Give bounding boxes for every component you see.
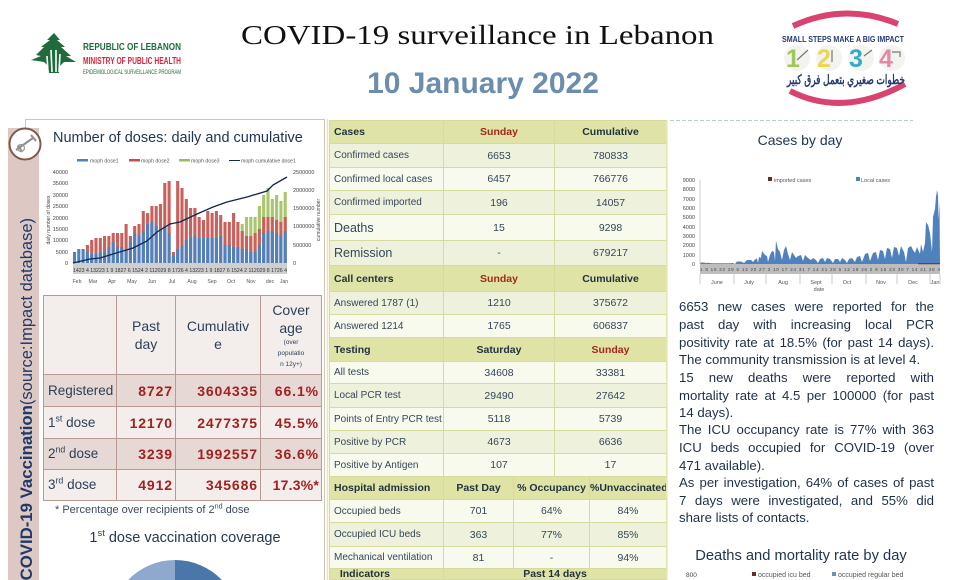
table: cases, calls, testing and hospital: Answered 1214 xyxy=(334,320,404,332)
bar chart: cases by day xyxy=(682,177,940,293)
bar chart: cases by day: 1 8 15 22 29 6 13 20 27 3 10 17 24 31 7 14 21 28 5 12 19 26 2 9 16 23 30 7 14 21 28 4 xyxy=(700,267,940,272)
table: vaccination doses xyxy=(43,295,322,501)
text block: daily summary: 6653 new cases were reported for the xyxy=(679,299,934,314)
chart axis: 3000 xyxy=(683,234,695,240)
chart axes: 30000 xyxy=(53,193,68,199)
panel: vaccination side band xyxy=(8,128,39,580)
chart axes: 40000 xyxy=(53,170,68,176)
table: vaccination doses: Past xyxy=(132,318,160,334)
table: vaccination doses: day xyxy=(135,336,157,352)
table: cases, calls, testing and hospital: 1210 xyxy=(487,297,511,309)
table: cases, calls, testing and hospital: 77% xyxy=(541,528,562,540)
table: cases, calls, testing and hospital: 5118 xyxy=(488,413,510,425)
text block: daily summary: 7 days were investigated, and 55% did xyxy=(679,493,934,508)
logo: Ministry of Public Health xyxy=(31,33,181,76)
table: cases, calls, testing and hospital: %Unvaccinated xyxy=(590,482,667,494)
table: vaccination doses: 2477375 xyxy=(197,414,258,430)
text block: daily summary: ICU beds occupied for COVID-19 (over xyxy=(679,440,934,455)
bar chart: doses daily and cumulative: Mar xyxy=(89,279,98,285)
side band title: COVID-19 Vaccination(source:Impact database) xyxy=(17,218,36,580)
table: vaccination doses: 36.6% xyxy=(275,446,319,462)
table: cases, calls, testing and hospital: Sunday xyxy=(480,126,518,138)
table: cases, calls, testing and hospital: 27642 xyxy=(596,390,625,402)
table: cases, calls, testing and hospital: 81 xyxy=(473,552,484,564)
chart legend: imported cases xyxy=(774,178,812,184)
table: vaccination doses: 1992557 xyxy=(197,446,258,462)
table: cases, calls, testing and hospital: 29490 xyxy=(484,390,514,402)
table: cases, calls, testing and hospital: Cases xyxy=(334,126,365,138)
bar chart: doses daily and cumulative: 1000000 xyxy=(293,224,314,230)
bar chart: doses daily and cumulative xyxy=(46,158,322,285)
chart axis: 5000 xyxy=(683,215,695,221)
heading: number of doses: Number of doses: daily and cumulative xyxy=(53,130,303,146)
bar chart: doses daily and cumulative: Jan xyxy=(280,279,288,285)
bar chart: doses daily and cumulative: Jun xyxy=(148,279,156,285)
chart: deaths legend and axis: occupied icu bed xyxy=(758,572,811,579)
chart axis: 4000 xyxy=(683,225,695,231)
table: cases, calls, testing and hospital: 701 xyxy=(470,505,487,517)
table: cases, calls, testing and hospital: Cumulative xyxy=(582,126,639,138)
bar chart: doses daily and cumulative: dec xyxy=(266,279,275,285)
table: vaccination doses: Registered xyxy=(48,382,113,398)
table: cases, calls, testing and hospital: Mechanical ventilation xyxy=(334,552,432,563)
chart legend: moph dose2 xyxy=(141,158,170,164)
heading: cases by day: Cases by day xyxy=(758,132,842,148)
text block: daily summary: mortality rate at 4.5 per 100000 (for past xyxy=(679,388,934,403)
logo: small steps make a big impact: 2 xyxy=(817,45,831,73)
table: cases, calls, testing and hospital: Testing xyxy=(334,344,371,356)
heading: first dose coverage: 1st dose vaccination coverage xyxy=(89,527,281,546)
table: cases, calls, testing and hospital: 5739 xyxy=(599,413,622,425)
bar chart: doses daily and cumulative: Sep xyxy=(207,279,217,285)
table: cases, calls, testing and hospital: 679217 xyxy=(593,247,628,259)
table: cases, calls, testing and hospital: 33381 xyxy=(596,366,625,378)
table: vaccination doses: 345686 xyxy=(206,477,258,493)
bar chart: cases by day: Jan xyxy=(931,280,939,286)
chart: deaths legend and axis: 800 xyxy=(686,572,697,579)
chart axis xyxy=(683,178,695,268)
chart axis: 6000 xyxy=(683,206,695,212)
table: vaccination doses: 17.3%* xyxy=(273,477,319,493)
table: cases, calls, testing and hospital: 606837 xyxy=(593,320,628,332)
table: cases, calls, testing and hospital: 84% xyxy=(618,505,639,517)
bar chart: doses daily and cumulative: cumulative number xyxy=(316,199,322,241)
table: cases, calls, testing and hospital: 375672 xyxy=(593,297,628,309)
table: cases, calls, testing and hospital: Local PCR test xyxy=(334,390,401,401)
table: cases, calls, testing and hospital: 6457 xyxy=(487,173,511,185)
chart axes: 0 xyxy=(65,261,68,267)
table: cases, calls, testing and hospital: 4673 xyxy=(487,436,511,448)
table: vaccination doses: 3604335 xyxy=(197,382,258,398)
chart legend: moph dose3 xyxy=(191,158,220,164)
chart axes: 5000 xyxy=(56,250,68,256)
bar chart: doses daily and cumulative: Apr xyxy=(108,279,116,285)
bar chart: cases by day: June xyxy=(711,280,723,286)
bar chart: cases by day: July xyxy=(744,280,754,286)
bar chart: cases by day: Oct xyxy=(843,280,852,286)
bar chart: doses daily and cumulative: Oct xyxy=(227,279,236,285)
logo: small steps make a big impact: 1 xyxy=(786,45,800,73)
text block: daily summary: As per investigation, 64% of cases of past xyxy=(679,475,934,490)
table: cases, calls, testing and hospital: 14057 xyxy=(596,196,625,208)
text block: daily summary: The ICU occupancy rate is 77% with 363 xyxy=(679,422,934,437)
table: vaccination doses: age xyxy=(279,320,303,336)
table: cases, calls, testing and hospital: Answered 1787 (1) xyxy=(334,298,418,308)
bar chart: doses daily and cumulative: 0 xyxy=(293,261,296,267)
table: cases, calls, testing and hospital: 17 xyxy=(605,459,616,471)
bar chart: cases by day: Dec xyxy=(908,280,918,286)
table: cases, calls, testing and hospital: 107 xyxy=(490,459,508,471)
chart axis: 9000 xyxy=(683,178,695,184)
date heading: 10 January 2022 xyxy=(367,67,599,100)
table: vaccination doses: 66.1% xyxy=(275,382,319,398)
bar chart: doses daily and cumulative: 2500000 xyxy=(293,170,314,176)
table: cases, calls, testing and hospital: Occupied ICU beds xyxy=(334,529,421,540)
table: cases, calls, testing and hospital: Occupied beds xyxy=(334,506,401,516)
footnote: * Percentage over recipients of 2nd dose xyxy=(55,502,249,516)
bar chart: cases by day: Nov xyxy=(876,280,886,286)
logo: small steps make a big impact: 4 xyxy=(879,45,893,73)
table: cases, calls, testing and hospital: Cumulative xyxy=(582,272,639,284)
dose 1 bars xyxy=(74,222,285,263)
chart axes: 35000 xyxy=(53,181,68,187)
local cases bars xyxy=(700,190,940,264)
chart axes: 10000 xyxy=(53,238,68,244)
dose 2 bars xyxy=(87,181,285,263)
table: cases, calls, testing and hospital: Positive by PCR xyxy=(334,436,406,448)
chart legend: moph cumulative dose1 xyxy=(241,158,296,164)
table: cases, calls, testing and hospital: 6653 xyxy=(487,150,511,162)
bar chart: doses daily and cumulative: Jul xyxy=(169,279,175,285)
table: cases, calls, testing and hospital: Past Day xyxy=(456,482,501,494)
table: vaccination doses: 3239 xyxy=(138,446,173,462)
table: vaccination doses: 4912 xyxy=(138,477,173,493)
table: cases, calls, testing and hospital: 64% xyxy=(541,505,562,517)
table: cases, calls, testing and hospital: - xyxy=(550,552,553,564)
table: cases, calls, testing and hospital: Deaths xyxy=(334,220,374,234)
icon: vaccine syringe badge xyxy=(8,128,42,160)
chart axes xyxy=(53,170,68,267)
bar chart: cases by day: date xyxy=(814,287,824,293)
table: cases, calls, testing and hospital: 34608 xyxy=(484,366,514,378)
table: vaccination doses: Cumulativ xyxy=(187,318,249,334)
table: cases, calls, testing and hospital: Sunday xyxy=(480,272,518,284)
table: cases, calls, testing and hospital: - xyxy=(497,247,501,259)
chart axis: 0 xyxy=(692,262,695,268)
text block: daily summary: The community transmission is at level 4. xyxy=(679,352,920,367)
chart axes: 20000 xyxy=(53,216,68,222)
chart: deaths legend and axis: occupied regular bed xyxy=(838,572,903,579)
bar chart: doses daily and cumulative: Feb xyxy=(73,279,82,285)
text block: daily summary: 14 days). xyxy=(679,405,733,420)
table: cases, calls, testing and hospital: 6636 xyxy=(599,436,622,448)
chart axes: 15000 xyxy=(53,227,68,233)
table: cases, calls, testing and hospital: Confirmed imported xyxy=(334,197,422,208)
table: cases, calls, testing and hospital: 363 xyxy=(470,528,487,540)
bar chart: doses daily and cumulative: 2000000 xyxy=(293,188,314,194)
chart legend: Local cases xyxy=(861,178,890,184)
table: cases, calls, testing and hospital: Remission xyxy=(334,246,392,260)
logo: small steps make a big impact: 3 xyxy=(849,45,863,73)
text block: daily summary: 471 available). xyxy=(679,458,765,473)
table: cases, calls, testing and hospital: Confirmed cases xyxy=(334,150,409,161)
table: vaccination doses: (over xyxy=(284,338,298,346)
table: vaccination doses: 8727 xyxy=(138,382,173,398)
bar chart: doses daily and cumulative: May xyxy=(127,279,137,285)
table: vaccination doses: 2nd dose xyxy=(48,444,98,461)
text block: daily summary: past day with increasing local PCR xyxy=(679,317,934,332)
table: cases, calls, testing and hospital: 15 xyxy=(493,222,505,234)
dose 3 bars xyxy=(242,188,285,263)
bar chart: doses daily and cumulative: 1423 4 13223 1 9 1827 6 1524 2 112029 8 1726 4 13223 1 9 1827 6 1524 2 112029 8 1726 4 xyxy=(73,268,287,274)
chart axes: 25000 xyxy=(53,204,68,210)
chart: deaths legend and axis xyxy=(686,572,903,579)
bar chart: doses daily and cumulative: 1500000 xyxy=(293,206,314,212)
bar chart: doses daily and cumulative: Nov xyxy=(246,279,256,285)
text block: daily summary: share lists of contacts. xyxy=(679,510,809,525)
bar chart: cases by day: Sept xyxy=(810,280,822,286)
table: vaccination doses: 3rd dose xyxy=(48,476,96,492)
pie chart: first dose coverage xyxy=(128,560,222,580)
bar chart: doses daily and cumulative: daily number of doses xyxy=(46,195,52,244)
chart legend xyxy=(77,158,296,164)
table: vaccination doses: populatio xyxy=(278,350,304,356)
table: cases, calls, testing and hospital: Sunday xyxy=(592,344,629,356)
table: vaccination doses: 12170 xyxy=(130,414,173,430)
table: vaccination doses: Cover xyxy=(272,302,310,318)
table: cases, calls, testing and hospital xyxy=(329,120,667,580)
table: vaccination doses: n 12y+) xyxy=(280,360,302,368)
cumulative line xyxy=(73,177,287,263)
chart axis: 7000 xyxy=(683,197,695,203)
table: cases, calls, testing and hospital: Hospital admission xyxy=(334,482,430,494)
chart axis: 2000 xyxy=(683,243,695,249)
imported cases bars xyxy=(918,263,940,265)
table: cases, calls, testing and hospital: 85% xyxy=(618,528,639,540)
chart axis: 8000 xyxy=(683,187,695,193)
table: cases, calls, testing and hospital: 9298 xyxy=(599,222,622,234)
panel: vaccination xyxy=(25,119,325,580)
table: vaccination doses: 45.5% xyxy=(275,414,319,430)
chart legend xyxy=(768,177,890,184)
heading: deaths and mortality: Deaths and mortality rate by day xyxy=(695,548,907,564)
chart legend: moph dose1 xyxy=(90,158,119,164)
bar chart: cases by day: Aug xyxy=(778,280,788,286)
table: cases, calls, testing and hospital: 196 xyxy=(490,196,508,208)
table: cases, calls, testing and hospital: % Occupancy xyxy=(517,482,586,494)
table: cases, calls, testing and hospital: Points of Entry PCR test xyxy=(334,414,442,424)
bar chart: doses daily and cumulative: Aug xyxy=(187,279,197,285)
table: cases, calls, testing and hospital: 780833 xyxy=(593,150,628,162)
table: cases, calls, testing and hospital: 766776 xyxy=(593,173,628,185)
logo: small steps make a big impact xyxy=(782,10,906,106)
text block: daily summary: positivity rate at 18.5% (for past 14 days). xyxy=(679,335,934,350)
text block: daily summary: 15 new deaths were reported with xyxy=(679,370,934,385)
table: cases, calls, testing and hospital: Call centers xyxy=(334,272,394,284)
table: cases, calls, testing and hospital: Saturday xyxy=(477,344,521,356)
table: cases, calls, testing and hospital: Positive by Antigen xyxy=(334,460,418,470)
table: cases, calls, testing and hospital: 1765 xyxy=(487,320,511,332)
table: cases, calls, testing and hospital: 94% xyxy=(618,552,639,564)
table: cases, calls, testing and hospital: All tests xyxy=(334,367,369,378)
table: cases, calls, testing and hospital: Confirmed local cases xyxy=(334,174,432,184)
table: vaccination doses: 1st dose xyxy=(48,413,95,430)
chart axis: 1000 xyxy=(683,253,695,259)
title: COVID-19 surveillance in Lebanon xyxy=(241,20,715,50)
bar chart: doses daily and cumulative: 500000 xyxy=(293,243,311,249)
text block: daily summary xyxy=(679,299,934,525)
table: vaccination doses: e xyxy=(214,336,222,352)
